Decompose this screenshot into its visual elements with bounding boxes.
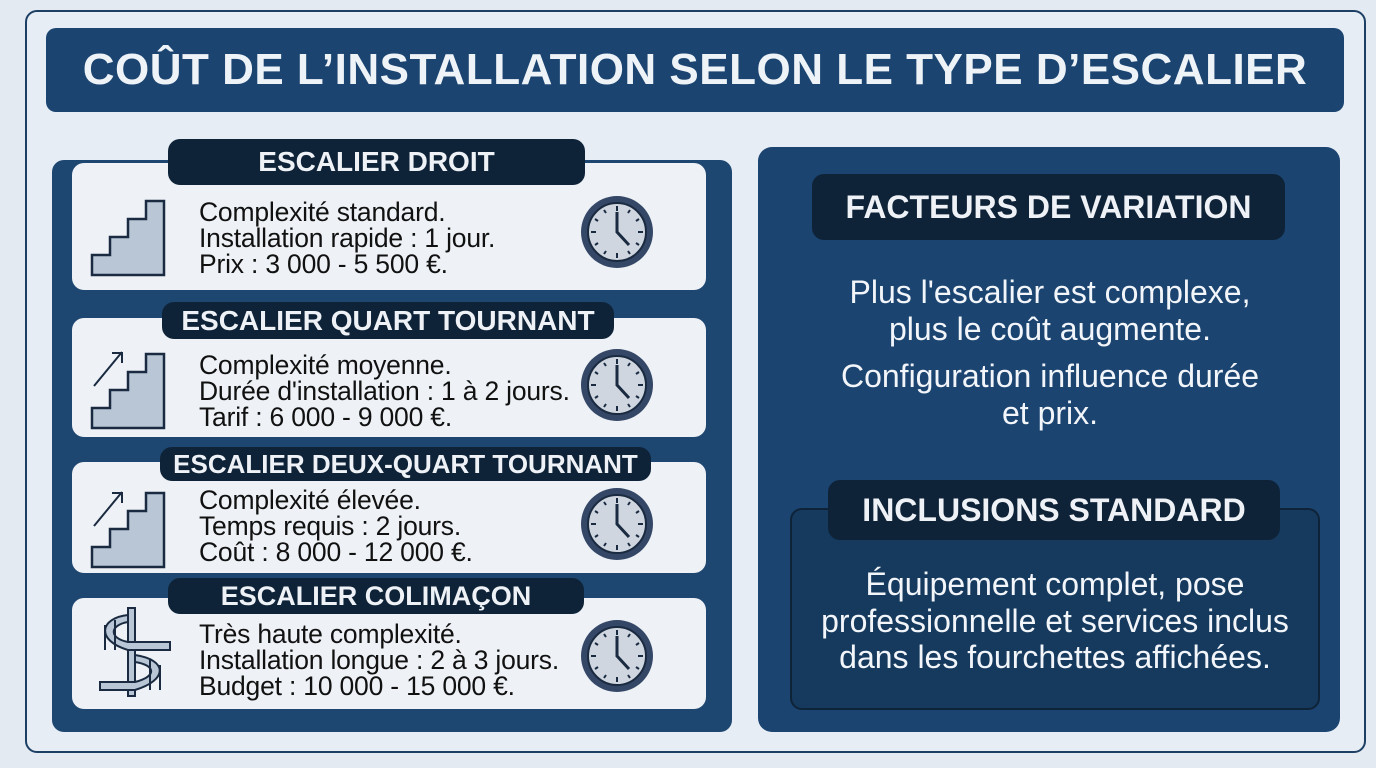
text: droit (199, 197, 495, 279)
icon: clock 4 (581, 620, 653, 692)
text: colimaçon (199, 619, 559, 701)
text: quart: Tarif : 6 000 - 9 000 €. (199, 402, 452, 432)
text: facteurs (850, 274, 1250, 347)
label: escalier droit: ESCALIER DROIT (258, 146, 495, 177)
text: droit: Installation rapide : 1 jour. (199, 223, 495, 253)
panel: right (758, 147, 1340, 732)
text: quart (199, 350, 570, 432)
text: droit: Prix : 3 000 - 5 500 €. (199, 249, 448, 279)
card: colimaçon (72, 598, 706, 709)
text: facteurs: Plus l'escalier est complexe, (850, 274, 1250, 310)
text: deux-quart: Temps requis : 2 jours. (199, 511, 461, 541)
box: inclusions (790, 508, 1320, 710)
label: quart tournant: ESCALIER QUART TOURNANT (181, 304, 595, 336)
label: deux-quart tournant: ESCALIER DEUX-QUART TOURNANT (173, 448, 638, 478)
text: configuration: Configuration influence durée (841, 358, 1259, 394)
icon: clock 1 (581, 196, 653, 268)
text: inclusions: professionnelle et services inclus (821, 602, 1289, 638)
label: colimaçon (168, 578, 584, 614)
icon: arrow 2 (94, 352, 122, 386)
text: deux-quart (199, 485, 473, 567)
icon: stairs 3 (92, 493, 164, 567)
text: inclusions (821, 566, 1289, 675)
icon: arrow 3 (94, 492, 122, 526)
icon: clock 3 (581, 488, 653, 560)
text: colimaçon: Installation longue : 2 à 3 jours. (199, 645, 559, 675)
text: inclusions: dans les fourchettes affichées. (839, 639, 1271, 675)
text: inclusions: Équipement complet, pose (866, 566, 1244, 602)
icon: stairs 1 (92, 201, 164, 275)
text: deux-quart: Complexité élevée. (199, 485, 421, 515)
card: deux-quart tournant (72, 462, 706, 573)
heading: inclusions: INCLUSIONS STANDARD (862, 492, 1246, 528)
text: quart: Complexité moyenne. (199, 350, 452, 380)
label: escalier droit (168, 139, 585, 185)
icon: stairs 2 (92, 354, 164, 428)
text: facteurs: plus le coût augmente. (889, 311, 1211, 347)
heading: facteurs: FACTEURS DE VARIATION (846, 188, 1251, 224)
panel: stair types (52, 160, 732, 732)
text: colimaçon: Très haute complexité. (199, 619, 462, 649)
icon: spiral stairs (100, 608, 170, 696)
text: colimaçon: Budget : 10 000 - 15 000 €. (199, 671, 515, 701)
text: deux-quart: Coût : 8 000 - 12 000 €. (199, 537, 473, 567)
title: COÛT DE L’INSTALLATION SELON LE TYPE D’ESCALIER (83, 45, 1307, 94)
heading: inclusions (828, 480, 1280, 540)
text: quart: Durée d'installation : 1 à 2 jours. (199, 376, 570, 406)
heading: facteurs (812, 174, 1285, 240)
title (46, 28, 1344, 112)
text: configuration: et prix. (1002, 395, 1098, 431)
text: droit: Complexité standard. (199, 197, 445, 227)
card: escalier droit (72, 163, 706, 290)
text: configuration (841, 358, 1259, 431)
icon: clock 2 (581, 349, 653, 421)
card: quart tournant (72, 318, 706, 437)
label: colimaçon: ESCALIER COLIMAÇON (221, 580, 531, 610)
